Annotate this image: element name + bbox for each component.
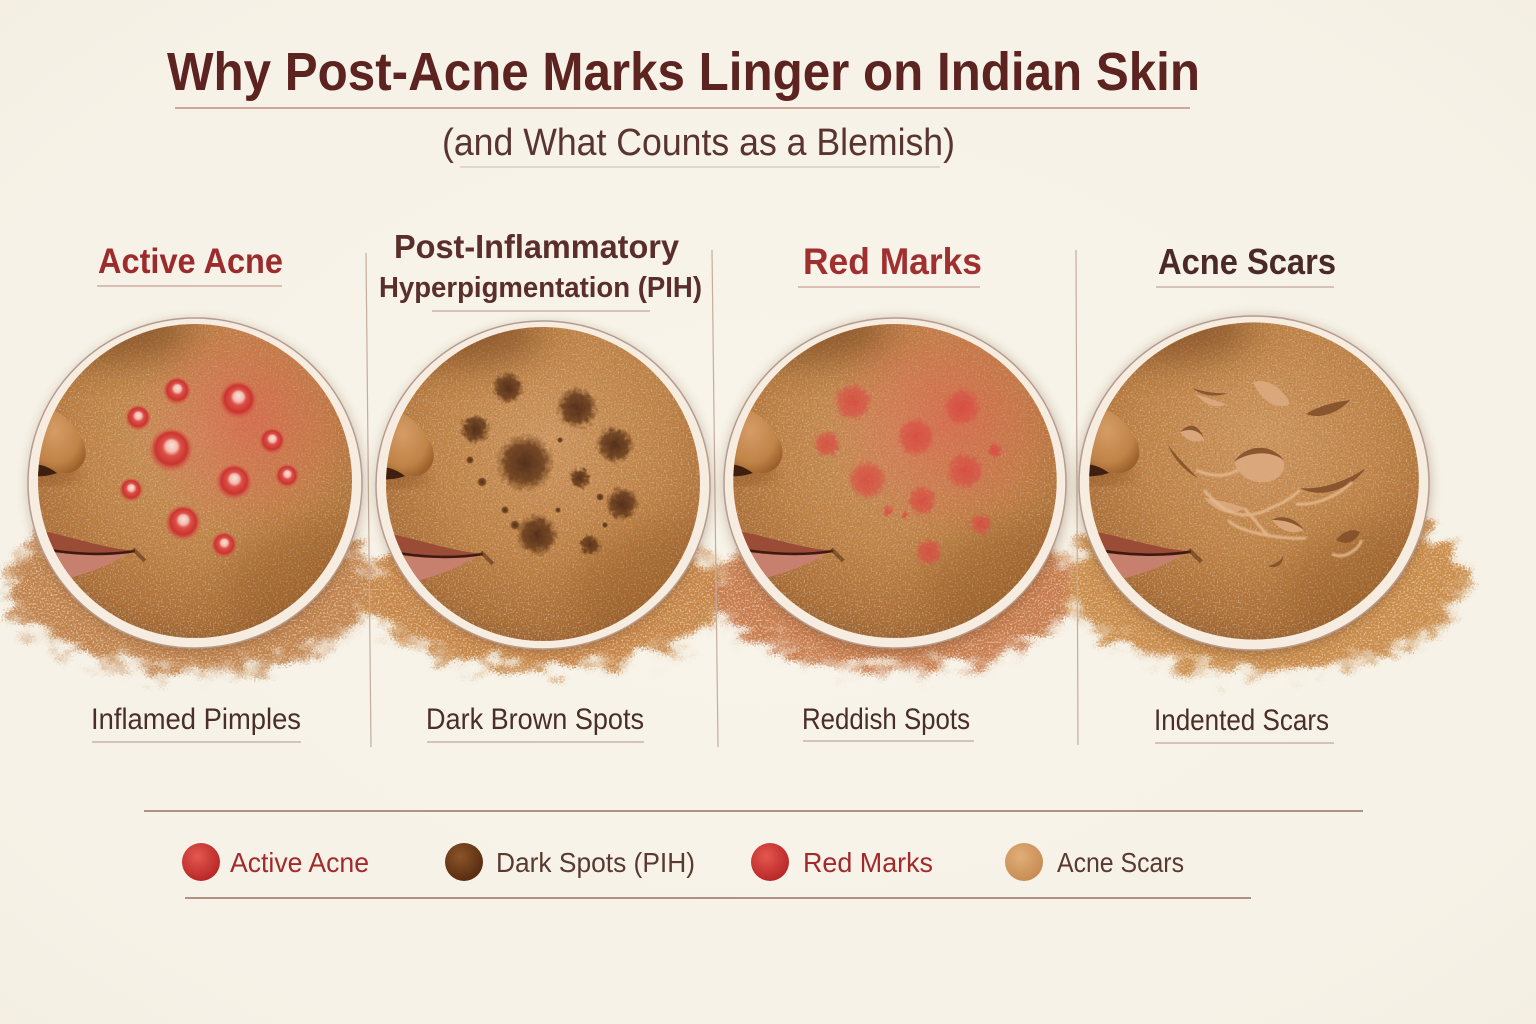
legend bbox=[182, 843, 1184, 881]
skin circle: active acne bbox=[22, 314, 370, 657]
caption: indented scars: Indented Scars bbox=[1154, 704, 1329, 737]
title: Why Post-Acne Marks Linger on Indian Skin bbox=[167, 42, 1200, 102]
heading: acne scars: Acne Scars bbox=[1158, 241, 1336, 282]
caption: inflamed pimples: Inflamed Pimples bbox=[91, 703, 301, 736]
caption: reddish spots: Reddish Spots bbox=[802, 703, 970, 736]
legend item: acne scars bbox=[1005, 843, 1184, 881]
legend item: red marks: Red Marks bbox=[803, 847, 933, 878]
skin texture splash band bbox=[7, 492, 1463, 672]
legend item: dark spots: Dark Spots (PIH) bbox=[496, 847, 695, 878]
heading: post-inflammatory hyperpigmentation: Post-Inflammatory bbox=[394, 228, 680, 265]
heading: post-inflammatory hyperpigmentation bbox=[379, 228, 702, 311]
panel: PIH bbox=[373, 228, 753, 742]
legend item: red marks bbox=[751, 843, 933, 881]
skin circle: acne scars bbox=[1076, 297, 1474, 663]
panel: red marks bbox=[720, 241, 1111, 741]
panel: acne scars bbox=[1076, 241, 1474, 743]
legend item: active acne bbox=[182, 843, 369, 881]
heading: post-inflammatory hyperpigmentation: Hyperpigmentation (PIH) bbox=[379, 272, 702, 304]
panel: active acne bbox=[25, 242, 405, 742]
legend item: active acne: Active Acne bbox=[230, 847, 369, 878]
caption: dark brown spots: Dark Brown Spots bbox=[426, 703, 644, 736]
skin circle: red marks bbox=[717, 312, 1075, 660]
skin circle: PIH bbox=[373, 302, 753, 664]
heading: active acne: Active Acne bbox=[98, 242, 283, 281]
subtitle: (and What Counts as a Blemish) bbox=[442, 122, 955, 164]
heading: red marks: Red Marks bbox=[803, 241, 982, 282]
legend item: dark spots bbox=[445, 843, 695, 881]
legend item: acne scars: Acne Scars bbox=[1057, 847, 1184, 878]
